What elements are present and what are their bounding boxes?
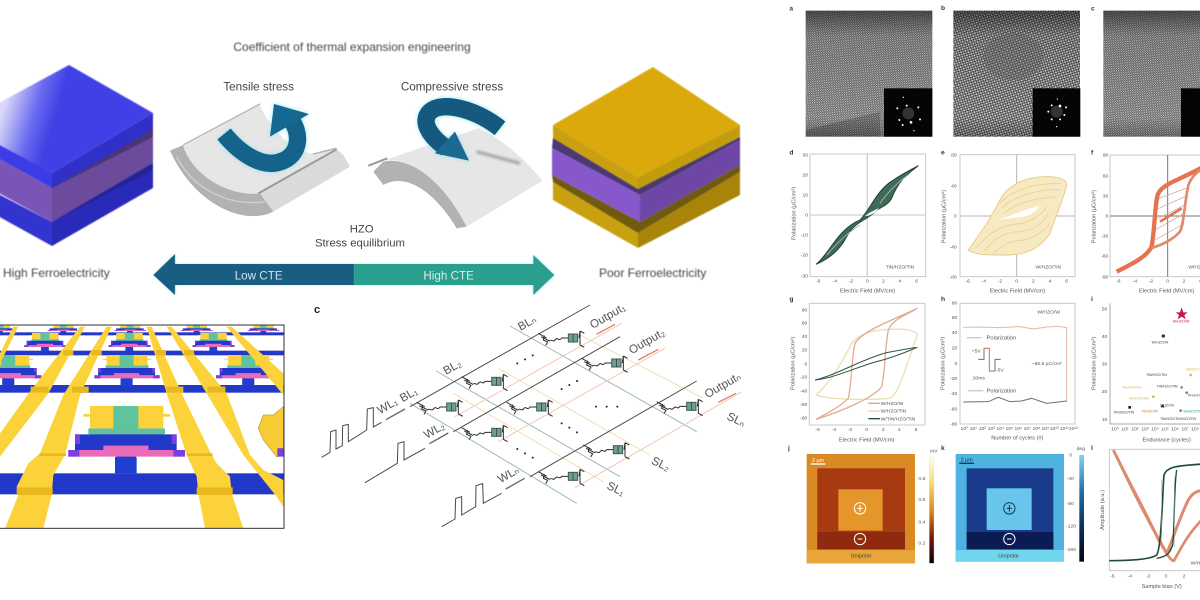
- chart i: polarization vs endurance scatter: 30: [1102, 361, 1108, 367]
- panel letters g-l: i: [1091, 296, 1093, 303]
- top gold layer: [553, 67, 740, 189]
- chart i: polarization vs endurance scatter: 10⁰: [1111, 427, 1119, 433]
- tensile curved sheet: [170, 104, 350, 216]
- label: low CTE: Low CTE: [235, 269, 283, 282]
- chart g: three device comparison: 4: [898, 427, 901, 433]
- chart h: endurance cycles: 80: [952, 300, 958, 306]
- chart g: three device comparison: 0: [865, 427, 868, 433]
- circuit labels: WLₙ: [496, 463, 522, 486]
- panel j: amplitude map: 0.2: [918, 540, 925, 546]
- chart e: W/HZO/TiN hysteresis: 0: [954, 214, 957, 220]
- output lines: [455, 323, 742, 488]
- chart g: three device comparison: [791, 303, 925, 443]
- chart h: endurance cycles: 10⁷: [1024, 426, 1031, 432]
- chart g: three device comparison: 40: [802, 334, 808, 340]
- circuit labels: [375, 301, 748, 499]
- chart i: polarization vs endurance scatter: Ru/HZO/Ru: [1123, 385, 1142, 389]
- chart f: W/HZO/W hysteresis: 0: [1106, 214, 1109, 220]
- chart i: polarization vs endurance scatter: Ir/HZO/Ir: [1160, 404, 1175, 408]
- output arrows: [597, 324, 736, 402]
- ellipsis dots: [516, 354, 618, 459]
- chart l: amplitude vs sample bias: 0: [1165, 574, 1168, 580]
- panel j: amplitude map: 2 μm: [812, 458, 825, 464]
- chart g: three device comparison: W/HZO/TiN: [881, 409, 907, 415]
- chart h: endurance cycles: 20: [952, 345, 958, 351]
- chart l: amplitude vs sample bias: [1100, 449, 1200, 590]
- panel k: phase map: -40: [1067, 476, 1074, 482]
- chart h: endurance cycles: -40: [950, 391, 958, 397]
- chart i: polarization vs endurance scatter: TiN/HZO/TiN: [1157, 384, 1178, 388]
- chart i: polarization vs endurance scatter: TiN/HZO/TiN/HZO/TiN: [1160, 417, 1197, 421]
- chart d: TiN/HZO/TiN hysteresis: 4: [899, 279, 902, 285]
- chart d: TiN/HZO/TiN hysteresis: -2: [849, 279, 853, 285]
- chart h: endurance cycles: Polarization: [987, 388, 1016, 394]
- chart d: TiN/HZO/TiN hysteresis: -10: [801, 233, 808, 239]
- chart g: three device comparison: -20: [800, 375, 808, 381]
- chart e: W/HZO/TiN hysteresis: -2: [998, 279, 1002, 285]
- chart g: three device comparison: 80: [802, 307, 808, 313]
- panel k: phase map: -80: [1067, 501, 1074, 507]
- chart f: W/HZO/W hysteresis: Polarization (μC/cm²): [1092, 190, 1098, 243]
- label: high CTE: High CTE: [423, 269, 474, 282]
- chart h: endurance cycles: Polarization (μC/cm²): [941, 337, 947, 390]
- panel letters a-f: d: [789, 149, 793, 156]
- blue word lines: [0, 332, 286, 494]
- chart f: W/HZO/W hysteresis: -6: [1116, 279, 1121, 285]
- chart d: TiN/HZO/TiN hysteresis: -20: [801, 253, 808, 259]
- panel group: bottom characterization (g–l): [787, 296, 1200, 590]
- chart e: W/HZO/TiN hysteresis: Polarization (μC/cm²): [942, 190, 948, 243]
- panel letters a-f: e: [941, 149, 945, 156]
- chart d: TiN/HZO/TiN hysteresis: Electric Field (MV/cm): [840, 289, 895, 295]
- chart f: W/HZO/W hysteresis: -30: [1101, 234, 1109, 240]
- panel k: phase map: 0: [1069, 453, 1072, 459]
- chart e: W/HZO/TiN hysteresis: Electric Field (MV/cm): [990, 289, 1045, 295]
- panel k: phase map: -120: [1066, 523, 1076, 529]
- chart i: polarization vs endurance scatter: 10¹: [1121, 427, 1129, 433]
- chart h: endurance cycles: W/HZO/W: [1037, 309, 1060, 315]
- chart h: endurance cycles: -20: [950, 376, 958, 382]
- chart f: W/HZO/W hysteresis: 0: [1166, 279, 1169, 285]
- chart d: TiN/HZO/TiN hysteresis: 0: [805, 213, 808, 219]
- chart f: W/HZO/W hysteresis: -4: [1133, 279, 1137, 285]
- panel k: phase map: Unipolar: [998, 554, 1019, 560]
- chart h: endurance cycles: 10⁴: [996, 426, 1004, 432]
- circuit labels: SLₙ: [725, 410, 748, 430]
- chart h: endurance cycles: 60: [952, 315, 958, 321]
- panel letters g-l: h: [941, 296, 945, 303]
- word lines with pulses: [322, 305, 697, 527]
- arrow: compressive bend: [426, 107, 500, 161]
- chart d: TiN/HZO/TiN hysteresis: -30: [801, 273, 808, 279]
- chart f: W/HZO/W hysteresis: -2: [1149, 279, 1153, 285]
- chart l: amplitude vs sample bias: -2: [1146, 574, 1151, 580]
- label: HZO stress equilibrium: HZO: [350, 223, 374, 235]
- chart h: endurance cycles: [941, 300, 1078, 441]
- panel k: phase map: 2 μm: [961, 458, 973, 464]
- circuit labels: WL₂: [422, 419, 447, 442]
- chart d: TiN/HZO/TiN hysteresis: [792, 153, 926, 295]
- chart i: polarization vs endurance scatter: TiN/HZO/TiN: [1113, 410, 1135, 414]
- chart h: endurance cycles: ~56.6 μC/cm²: [1032, 361, 1062, 367]
- circuit labels: Outputₙ: [702, 370, 743, 401]
- chart i: polarization vs endurance scatter: 10³: [1141, 427, 1149, 433]
- chart i: polarization vs endurance scatter: 10⁷: [1181, 427, 1189, 433]
- chart l: amplitude vs sample bias: Amplitude (a.u.): [1100, 490, 1106, 530]
- chart h: endurance cycles: 10⁵: [1006, 426, 1013, 432]
- chart i: polarization vs endurance scatter: 50: [1102, 307, 1108, 313]
- chart g: three device comparison: Electric Field (MV/cm): [839, 437, 894, 443]
- chart g: three device comparison: -40: [800, 389, 808, 395]
- chart l: amplitude vs sample bias: 2: [1183, 574, 1186, 580]
- panel j: amplitude map: [807, 449, 938, 563]
- circuit labels: SL₂: [649, 454, 672, 474]
- chart i: polarization vs endurance scatter: 10⁸: [1191, 427, 1199, 433]
- chart f: W/HZO/W hysteresis: 30: [1103, 194, 1109, 200]
- panel letter c: c: [314, 304, 320, 316]
- panel c: TEM image: [1103, 11, 1200, 137]
- chart e: W/HZO/TiN hysteresis: 2: [1032, 279, 1035, 285]
- chart f: W/HZO/W hysteresis: Electric Field (MV/cm): [1139, 289, 1194, 295]
- circuit labels: Output₁: [588, 301, 628, 332]
- crossing shadows: [17, 350, 233, 495]
- title: Coefficient of thermal expansion engineering: [233, 40, 471, 54]
- chart h: endurance cycles: 10¹: [970, 426, 977, 432]
- panel frame: [0, 325, 284, 528]
- chart g: three device comparison: -6: [815, 427, 820, 433]
- chart h: endurance cycles: 10¹¹: [1060, 426, 1069, 432]
- chart d: TiN/HZO/TiN hysteresis: -6: [816, 279, 821, 285]
- chart e: W/HZO/TiN hysteresis: 4: [1049, 279, 1052, 285]
- chart f: W/HZO/W hysteresis: -60: [1101, 254, 1109, 260]
- chart f: W/HZO/W hysteresis: [1092, 153, 1200, 295]
- panel letters g-l: k: [941, 445, 945, 452]
- right edge partial device: [258, 407, 283, 457]
- chart g: three device comparison: 6: [915, 427, 918, 433]
- chart i: polarization vs endurance scatter: 10: [1102, 417, 1108, 423]
- memory cells: [417, 331, 703, 486]
- chart i: polarization vs endurance scatter: 40: [1102, 334, 1108, 340]
- bottom gold layer: [552, 165, 740, 248]
- panel: high ferroelectricity stack: [0, 65, 153, 246]
- chart g: three device comparison: -2: [848, 427, 852, 433]
- label: high ferroelectricity: High Ferroelectricity: [3, 266, 110, 280]
- source lines: [453, 335, 703, 482]
- panel letters a-f: b: [941, 5, 945, 12]
- chart g: three device comparison: 20: [802, 348, 808, 354]
- panel letters g-l: [787, 296, 1093, 452]
- middle purple layer: [0, 125, 153, 222]
- label: HZO stress equilibrium: [315, 223, 405, 250]
- circuit labels: WL₁: [375, 395, 400, 417]
- panel: device array perspective: [0, 325, 286, 528]
- chart d: TiN/HZO/TiN hysteresis: 2: [882, 279, 885, 285]
- chart h: endurance cycles: 10⁹: [1041, 426, 1049, 432]
- chart h: endurance cycles: 20ms: [973, 375, 985, 381]
- chart g: three device comparison: -80: [800, 415, 808, 421]
- chart g: three device comparison: Polarization (μC/cm²): [791, 337, 797, 390]
- far device units: [0, 325, 281, 386]
- panel j: amplitude map: 0.4: [918, 519, 925, 525]
- chart i: polarization vs endurance scatter: 10⁶: [1171, 427, 1179, 433]
- chart i: polarization vs endurance scatter: W/HZO/W: [1152, 340, 1169, 344]
- panel letters g-l: g: [789, 296, 793, 303]
- near device unit: [68, 406, 185, 473]
- panel letters a-f: [789, 5, 1095, 156]
- chart h: endurance cycles: 10²: [979, 426, 986, 432]
- chart i: polarization vs endurance scatter: 10⁵: [1161, 427, 1169, 433]
- label: compressive stress: Compressive stress: [401, 81, 503, 94]
- chart d: TiN/HZO/TiN hysteresis: -4: [833, 279, 837, 285]
- panel j: amplitude map: 0.6: [918, 497, 925, 503]
- chart g: three device comparison: W/TiN/HZO/TiN: [881, 416, 916, 422]
- panel a: TEM image: [806, 11, 932, 137]
- label: tensile stress: Tensile stress: [223, 81, 294, 94]
- chart i: polarization vs endurance scatter: 10⁴: [1151, 427, 1159, 433]
- chart f: W/HZO/W hysteresis: 2: [1183, 279, 1186, 285]
- panel j: amplitude map: Unipolar: [850, 554, 872, 560]
- chart h: endurance cycles: 40: [952, 330, 958, 336]
- chart g: three device comparison: 0: [805, 361, 808, 367]
- chart e: W/HZO/TiN hysteresis: -6: [965, 279, 970, 285]
- chart f: W/HZO/W hysteresis: 60: [1103, 173, 1109, 179]
- panel group: top characterization (a–f): [789, 5, 1200, 295]
- middle purple layer: [552, 137, 740, 222]
- chart e: W/HZO/TiN hysteresis: [942, 153, 1075, 295]
- bit lines: [410, 326, 697, 503]
- panel: crossbar circuit: [322, 301, 748, 527]
- arrow: tensile bend: [224, 104, 309, 163]
- chart h: endurance cycles: -60: [950, 407, 958, 413]
- chart f: W/HZO/W hysteresis: -90: [1101, 274, 1109, 280]
- panel letters a-f: f: [1091, 149, 1094, 156]
- chart i: polarization vs endurance scatter: 20: [1102, 389, 1108, 395]
- chart i: polarization vs endurance scatter: [1092, 303, 1200, 443]
- chart d: TiN/HZO/TiN hysteresis: 6: [915, 279, 918, 285]
- chart h: endurance cycles: 10³: [988, 426, 995, 432]
- chart h: endurance cycles: 10¹⁰: [1050, 426, 1059, 432]
- chart h: endurance cycles: 0: [955, 361, 958, 367]
- circuit labels: BL₁: [398, 385, 420, 405]
- yellow bit lines: [0, 327, 283, 528]
- panel letters a-f: c: [1091, 6, 1095, 13]
- chart i: polarization vs endurance scatter: Endurance (cycles): [1142, 437, 1191, 443]
- panel: stress illustration: [153, 81, 554, 295]
- chart i: polarization vs endurance scatter: W/HZO/W: [1173, 319, 1190, 323]
- chart h: endurance cycles: +5V: [972, 349, 981, 355]
- panel b: TEM image: [953, 11, 1080, 137]
- chart i: polarization vs endurance scatter: Polarization (μC/cm²): [1092, 337, 1098, 390]
- chart e: W/HZO/TiN hysteresis: -4: [982, 279, 986, 285]
- chart d: TiN/HZO/TiN hysteresis: Polarization (μC/cm²): [792, 187, 798, 240]
- chart h: endurance cycles: -5V: [996, 367, 1004, 373]
- label: HZO stress equilibrium: Stress equilibrium: [315, 238, 405, 250]
- chart d: TiN/HZO/TiN hysteresis: 30: [802, 153, 808, 159]
- compressive curved sheet: [368, 128, 543, 228]
- chart d: TiN/HZO/TiN hysteresis: 0: [866, 279, 869, 285]
- chart e: W/HZO/TiN hysteresis: 6: [1065, 279, 1068, 285]
- chart i: polarization vs endurance scatter: TiN/HZO/TiN: [1146, 373, 1167, 377]
- panel letters a-f: a: [789, 6, 793, 13]
- chart h: endurance cycles: Polarization: [987, 335, 1016, 341]
- chart i: polarization vs endurance scatter: 10²: [1131, 427, 1139, 433]
- chart e: W/HZO/TiN hysteresis: 40: [951, 183, 957, 189]
- chart e: W/HZO/TiN hysteresis: W/HZO/TiN: [1036, 264, 1062, 270]
- chart h: endurance cycles: -80: [950, 422, 958, 428]
- chart i: polarization vs endurance scatter: Mo/HZO/Mo: [1129, 396, 1149, 400]
- chart h: endurance cycles: 10⁰: [961, 426, 968, 432]
- chart e: W/HZO/TiN hysteresis: 0: [1015, 279, 1018, 285]
- chart e: W/HZO/TiN hysteresis: 80: [951, 153, 957, 159]
- arrow: CTE scale: [153, 254, 554, 295]
- chart h: endurance cycles: 10¹²: [1069, 426, 1078, 432]
- panel letters g-l: l: [1091, 445, 1093, 452]
- chart g: three device comparison: W/HZO/W: [881, 401, 904, 407]
- wordline arrows: [386, 409, 525, 489]
- circuit labels: BLₙ: [516, 313, 539, 334]
- panel k: phase map: [956, 446, 1085, 562]
- chart e: W/HZO/TiN hysteresis: -80: [949, 274, 957, 280]
- chart l: amplitude vs sample bias: -6: [1110, 574, 1115, 580]
- chart d: TiN/HZO/TiN hysteresis: 10: [802, 193, 808, 199]
- chart l: amplitude vs sample bias: Sample bias (V): [1142, 584, 1182, 590]
- chart f: W/HZO/W hysteresis: 90: [1103, 153, 1109, 159]
- top blue layer: [0, 65, 153, 188]
- chart i: polarization vs endurance scatter: Pt/HZO/Pt: [1142, 410, 1158, 414]
- chart g: three device comparison: 2: [882, 427, 885, 433]
- panel k: phase map: deg: [1077, 446, 1085, 452]
- panel k: phase map: -160: [1066, 547, 1076, 553]
- bottom blue layer: [0, 163, 153, 246]
- chart e: W/HZO/TiN hysteresis: -40: [949, 244, 957, 250]
- chart d: TiN/HZO/TiN hysteresis: TiN/HZO/TiN: [886, 264, 915, 270]
- chart h: endurance cycles: 10⁶: [1015, 426, 1022, 432]
- chart h: endurance cycles: Number of cycles (#): [991, 435, 1044, 441]
- chart h: endurance cycles: 10⁸: [1033, 426, 1040, 432]
- circuit labels: SL₁: [605, 479, 627, 499]
- panel: poor ferroelectricity stack: [552, 67, 740, 248]
- chart d: TiN/HZO/TiN hysteresis: 20: [802, 173, 808, 179]
- circuit labels: BL₂: [441, 357, 464, 378]
- chart g: three device comparison: -4: [832, 427, 836, 433]
- panel letters g-l: j: [787, 445, 790, 452]
- chart g: three device comparison: 60: [802, 321, 808, 327]
- panel j: amplitude map: mV: [930, 449, 938, 455]
- panel j: amplitude map: 0.8: [918, 476, 925, 482]
- label: poor ferroelectricity: Poor Ferroelectricity: [599, 266, 706, 280]
- circuit labels: Output₂: [627, 326, 667, 357]
- chart l: amplitude vs sample bias: -4: [1128, 574, 1132, 580]
- chart g: three device comparison: -60: [800, 402, 808, 408]
